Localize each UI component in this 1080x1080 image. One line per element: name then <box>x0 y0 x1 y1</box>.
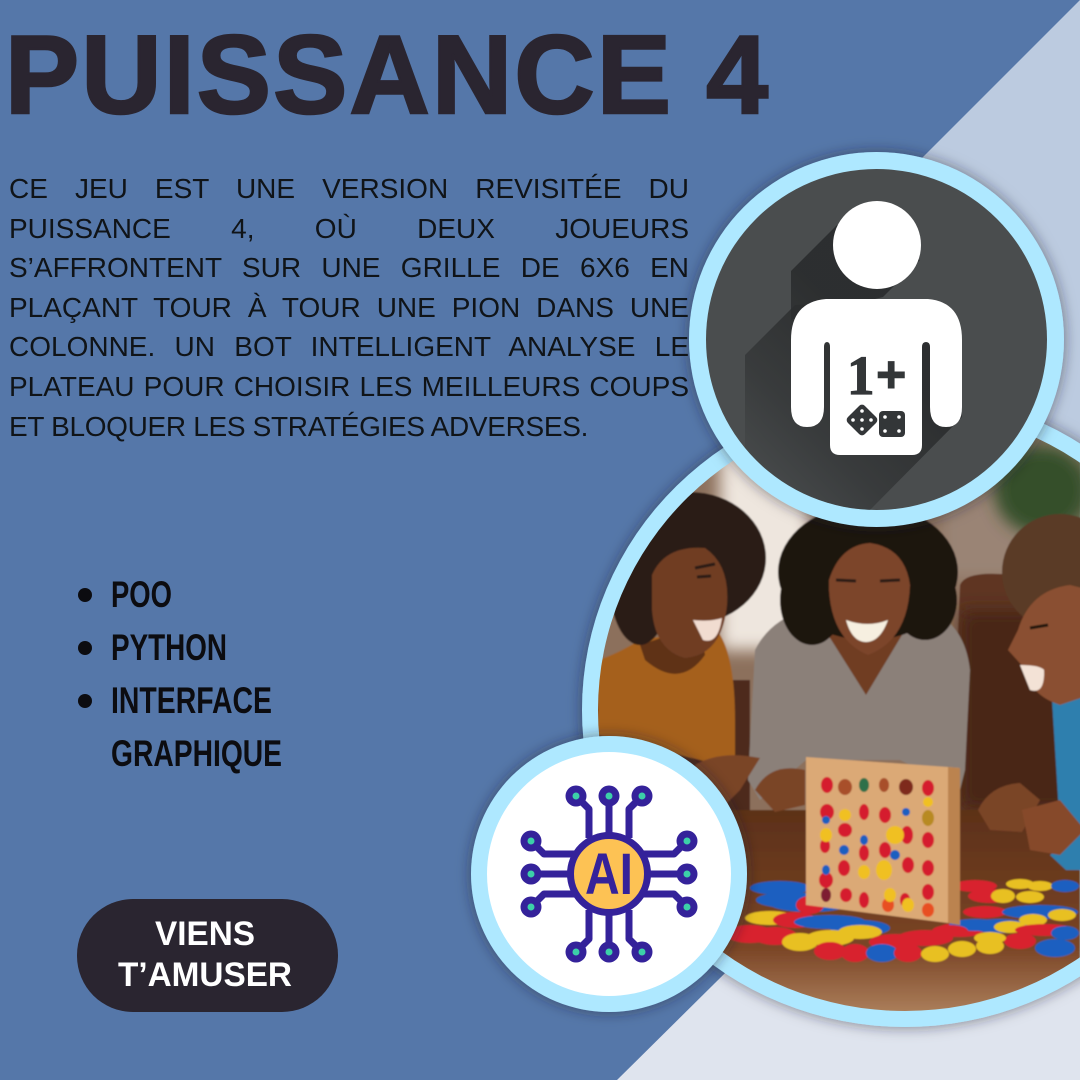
icon: long shadow <box>745 225 962 520</box>
photo: game tokens <box>726 879 1079 962</box>
title: PUISSANCE 4 <box>5 13 768 137</box>
photo: hands <box>695 755 1080 855</box>
photo: wooden game board <box>806 757 960 925</box>
bullet: interface graphique <box>78 680 282 774</box>
call to action button <box>77 899 338 1012</box>
background: lower-right triangle <box>617 800 1080 1080</box>
description paragraph <box>9 173 689 442</box>
bullet: Python: PYTHON <box>111 627 227 668</box>
description paragraph: COLONNE. UN BOT INTELLIGENT ANALYSE LE <box>9 331 689 362</box>
bullet: interface graphique: GRAPHIQUE <box>111 733 282 774</box>
bullet list <box>78 574 282 774</box>
bullet: Python <box>78 627 227 668</box>
icon: AI core: AI <box>585 842 633 907</box>
photo: right woman <box>1002 514 1080 870</box>
description paragraph: PUISSANCE 4, OÙ DEUX JOUEURS <box>9 213 689 244</box>
icon: circuit nodes <box>520 786 698 962</box>
icon: player silhouette <box>791 201 962 455</box>
icon: 1+ label: + <box>876 346 906 404</box>
icon: AI core <box>570 836 648 912</box>
call to action button: VIENS <box>155 915 255 953</box>
background: upper-right triangle <box>760 0 1080 600</box>
icon: 1+ label <box>847 345 906 406</box>
white circle badge: AI chip icon <box>471 736 747 1012</box>
photo: centre woman <box>748 504 970 800</box>
icon: dice <box>845 403 905 437</box>
dark circle badge: player icon <box>689 152 1064 527</box>
icon: 1+ label: 1 <box>847 345 874 406</box>
icon: circuit traces <box>531 796 687 952</box>
bullet: POO: POO <box>111 574 172 615</box>
bullet: interface graphique: INTERFACE <box>111 680 272 721</box>
description paragraph: PLATEAU POUR CHOISIR LES MEILLEURS COUPS <box>9 371 689 402</box>
description paragraph: S’AFFRONTENT SUR UNE GRILLE DE 6X6 EN <box>9 252 689 283</box>
bullet: POO <box>78 574 172 615</box>
description paragraph: CE JEU EST UNE VERSION REVISITÉE DU <box>9 173 689 204</box>
call to action button: T’AMUSER <box>118 956 292 994</box>
description paragraph: ET BLOQUER LES STRATÉGIES ADVERSES. <box>9 411 588 442</box>
photo circle: players around the game <box>582 390 1080 1040</box>
photo: left woman <box>598 492 766 770</box>
description paragraph: PLAÇANT TOUR À TOUR UNE PION DANS UNE <box>9 292 689 323</box>
photo: table <box>723 809 1080 1011</box>
photo backdrop: room <box>598 438 1080 812</box>
